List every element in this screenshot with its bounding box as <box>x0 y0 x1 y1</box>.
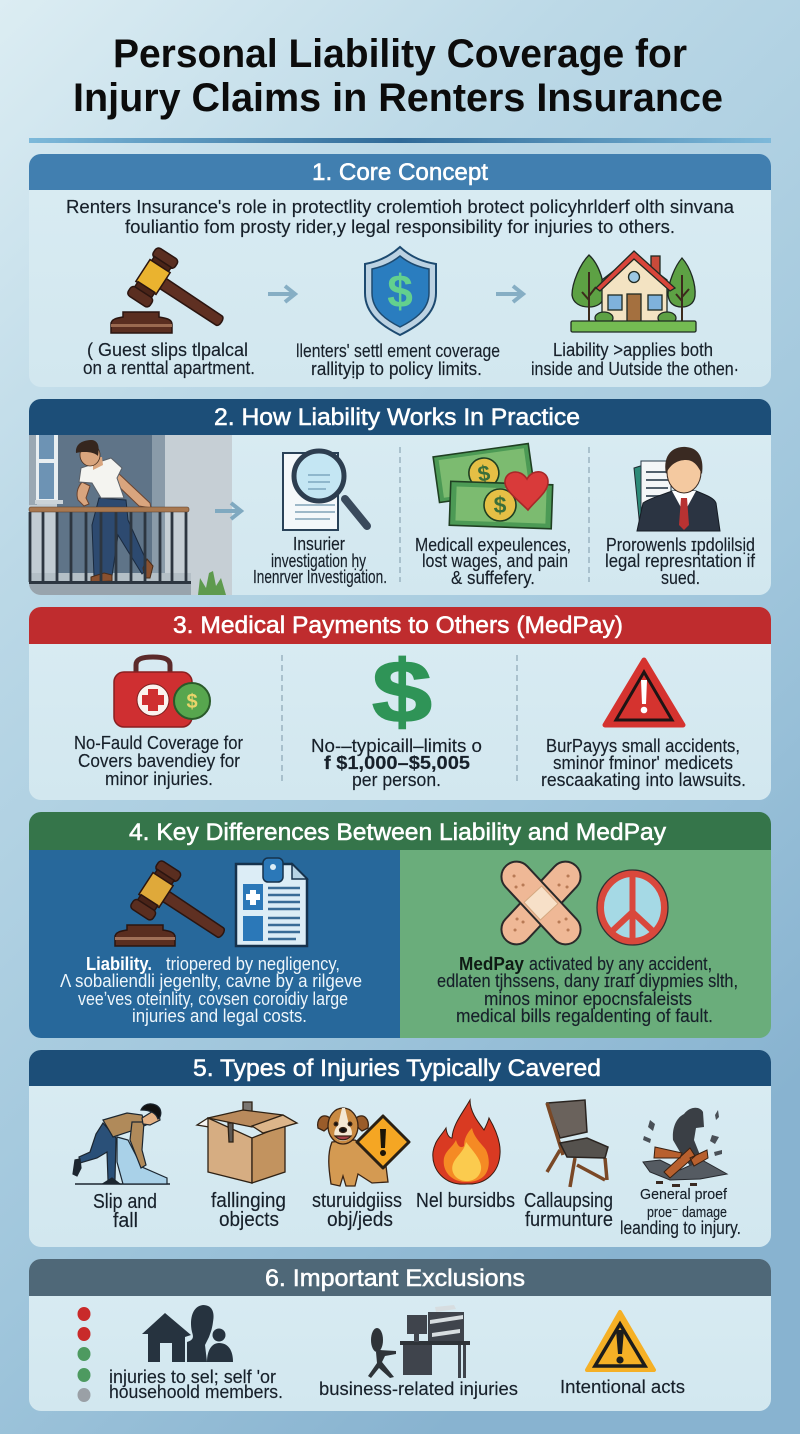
caption: guest slips: ( Guest slips tlpalcal <box>87 339 248 360</box>
caption: injuries to self: injuries to sel; self 'or <box>109 1366 276 1387</box>
caption: no-fault coverage <box>74 732 243 789</box>
man figure <box>76 440 153 582</box>
labels: injury types: objects <box>219 1209 279 1231</box>
labels: injury types: Callaupsing <box>524 1190 613 1212</box>
icon: first aid kit with coin: $ <box>186 691 198 713</box>
caption: intentional acts: Intentional acts <box>560 1376 685 1397</box>
status dots <box>78 1307 90 1402</box>
heading: how liability works <box>29 399 771 435</box>
icon: crossed bandages <box>495 855 587 951</box>
caption: legal representation: Prorowenls ɪpdolilsịd <box>606 534 755 555</box>
labels: injury types: sturuidgiiss <box>312 1190 402 1212</box>
heading: key differences: 4. Key Differences Between Liability and MedPay <box>129 819 667 846</box>
icon: peace symbol <box>597 870 668 945</box>
icon: lawyer with papers <box>634 447 720 531</box>
heading: how liability works: 2. How Liability Works In Practice <box>214 404 580 431</box>
caption: liability applies: inside and Uutside the othen· <box>531 358 739 379</box>
caption: insurer investigation <box>253 533 387 587</box>
caption: settlement coverage: rallityịp to policy limits. <box>311 358 482 379</box>
text: liability: Liability. <box>86 953 152 974</box>
icon: gavel <box>111 246 237 346</box>
caption: medical expenses: & suffefery. <box>451 567 535 588</box>
intro text: fouliantio fom prosty rider,y legal responsibility for injuries to others. <box>125 216 675 237</box>
caption: medical expenses <box>415 534 571 588</box>
labels: injury types: Slip and <box>93 1191 157 1213</box>
labels: injury types: obj/jeds <box>327 1209 393 1231</box>
icon: cardboard box <box>197 1102 297 1183</box>
labels: injury types: General proef <box>640 1186 728 1203</box>
panel: 1 core concept <box>29 154 771 387</box>
panel half: liability <box>29 850 400 1038</box>
caption: medical expenses: Medicall expeulences, <box>415 534 571 555</box>
labels: injury types: fallinging <box>211 1190 286 1212</box>
heading: key differences <box>29 812 771 850</box>
labels: injury types: leanding to injury. <box>620 1217 741 1238</box>
panel: 3 medpay <box>29 607 771 800</box>
icon: first aid kit with coin <box>114 657 210 727</box>
panel: 2 how liability works <box>29 399 771 595</box>
icon: gavel <box>115 859 238 958</box>
icon: collapsing chair <box>547 1100 608 1187</box>
caption: no-fault coverage: No-Fauld Coverage for <box>74 732 243 753</box>
balcony railing <box>29 507 191 595</box>
title <box>73 32 723 120</box>
heading: types of injuries <box>29 1050 771 1086</box>
caption: legal representation <box>605 534 756 588</box>
text: liability: veeʼves oteinlity, covsen coroidiy large <box>78 988 348 1009</box>
labels: injury types: Nel bursidbs <box>416 1190 515 1212</box>
caption: insurer investigation: Inenrver Investigation. <box>253 566 387 587</box>
icon: flame <box>433 1100 500 1184</box>
heading: medpay <box>29 607 771 644</box>
icon: person slipping <box>73 1104 170 1184</box>
heading: medpay: 3. Medical Payments to Others (MedPay) <box>173 612 623 639</box>
intro text: Renters Insurance's role in protectlity crolemtioh brotect policyhrlderf olth sinvana <box>66 196 735 217</box>
panel: 6 important exclusions <box>29 1259 771 1411</box>
icon: caution triangle <box>587 1312 654 1370</box>
photo: man falling on balcony <box>29 435 232 595</box>
caption: injuries to self: househoold members. <box>109 1381 283 1402</box>
icon: money and heart: $ <box>494 492 507 518</box>
icon: office desk and chair <box>368 1305 470 1378</box>
icon: house with trees <box>571 251 696 332</box>
icon: rubble and damage <box>643 1108 727 1187</box>
icon: warning triangle <box>605 660 683 725</box>
icon: house and household members <box>142 1305 233 1362</box>
arrow <box>268 286 295 302</box>
caption: liability applies <box>531 339 739 379</box>
text: liability <box>60 953 362 1026</box>
icon: money and heart: $ <box>476 460 492 487</box>
panel half: medpay <box>400 850 771 1038</box>
icon: money and heart <box>433 444 553 529</box>
caption: typical limits: per person. <box>352 769 441 790</box>
caption: legal representation: sued. <box>661 567 700 588</box>
heading: types of injuries: 5. Types of Injuries Typically Cavered <box>193 1055 601 1082</box>
intro text <box>66 196 735 237</box>
caption: settlement coverage <box>296 340 500 379</box>
text: medpay: activated by any accident, <box>529 953 712 974</box>
caption: insurer investigation: Insurier <box>293 533 345 554</box>
icon: shield with dollar: $ <box>387 265 413 317</box>
heading: important exclusions <box>29 1259 771 1296</box>
title: Injury Claims in Renters Insurance <box>73 76 723 120</box>
text: medpay: medical bills regaldenting of fault. <box>456 1005 713 1026</box>
caption: liability applies: Liability >applies both <box>553 339 713 360</box>
caption: settlement coverage: llenters' settl ement coverage <box>296 340 500 361</box>
icon: medical document <box>236 858 307 946</box>
caption: insurer investigation: investigation ḥy <box>271 550 367 571</box>
caption: typical limits <box>311 735 482 790</box>
text: liability: injuries and legal costs. <box>132 1005 307 1026</box>
text: medpay: edlaten tjhssens, dany ɪraɪf diypmies slth, <box>437 970 738 991</box>
icon: shield with dollar <box>365 247 436 335</box>
caption: medical expenses: lost wages, and pain <box>422 550 568 571</box>
caption: legal representation: legal represntation if <box>605 550 756 571</box>
icon: large dollar sign: $ <box>372 642 432 741</box>
caption: pays small accidents: rescaakating into lawsuits. <box>541 769 746 790</box>
heading: core concept <box>29 154 771 190</box>
caption: no-fault coverage: Covers bavendiey for <box>78 750 240 771</box>
heading: important exclusions: 6. Important Exclusions <box>265 1265 525 1292</box>
panel: 4 key differences <box>29 812 771 1038</box>
labels: injury types <box>93 1186 741 1238</box>
text: medpay <box>437 953 738 1026</box>
caption: business injuries: business-related injuries <box>319 1378 518 1399</box>
labels: injury types: proe⁻ damage <box>647 1204 727 1221</box>
caption: pays small accidents: BurPayys small accidents, <box>546 735 740 756</box>
panel: 5 types of injuries <box>29 1050 771 1247</box>
labels: injury types: fall <box>113 1210 138 1232</box>
caption: no-fault coverage: minor injuries. <box>105 768 213 789</box>
text: medpay: minos minor epocnsfaleists <box>484 988 692 1009</box>
caption: injuries to self <box>109 1366 283 1402</box>
text: liability: Λ sobaliendli jegenlty, cavne by a rilgeve <box>60 970 362 991</box>
title: Personal Liability Coverage for <box>113 32 687 76</box>
caption: typical limits: No-–typicaill–limits o <box>311 735 482 756</box>
icon: dog with warning sign <box>318 1108 409 1186</box>
text: medpay: MedPay <box>459 953 525 974</box>
caption: guest slips: on a renttal apartment. <box>83 357 255 378</box>
text: liability: triopered by negligency, <box>166 953 340 974</box>
caption: pays small accidents <box>541 735 746 790</box>
icon: document and magnifier <box>283 451 367 530</box>
labels: injury types: furmunture <box>525 1209 613 1231</box>
caption: guest slips <box>83 339 255 378</box>
arrow <box>215 503 241 519</box>
caption: typical limits: f $1,000–$5,005 <box>324 752 470 773</box>
arrow <box>496 286 523 302</box>
heading: core concept: 1. Core Concept <box>312 159 488 186</box>
caption: pays small accidents: sminor fminor' medicets <box>553 752 733 773</box>
